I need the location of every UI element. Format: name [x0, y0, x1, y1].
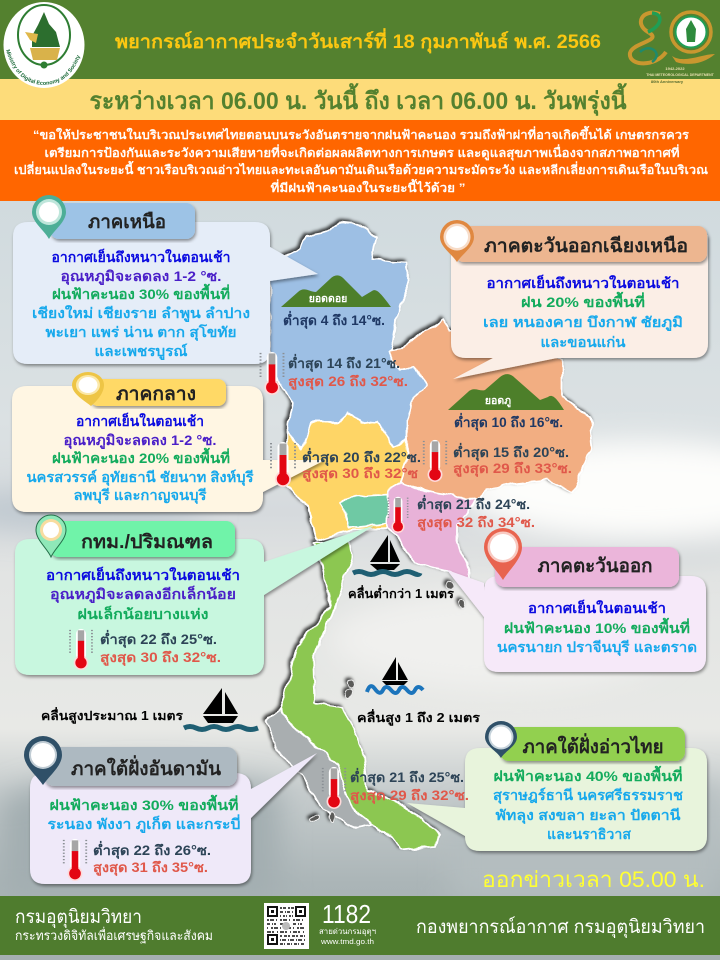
text: north forecast — [32, 248, 250, 360]
mountain: northeast peak — [448, 374, 564, 410]
temperature: north: ต่ำสุด 14 ถึง 21°ซ. — [288, 353, 400, 372]
islands — [311, 582, 466, 822]
QR code — [264, 903, 309, 949]
logo: ministry emblem — [4, 2, 84, 88]
label: waves Andaman: คลื่นสูงประมาณ 1 เมตร — [41, 707, 183, 724]
icon: thermometer northeast — [424, 440, 446, 482]
map of Thailand — [267, 223, 593, 850]
text: north forecast: เชียงใหม่ เชียงราย ลำพูน ลำปาง — [32, 304, 250, 322]
temperature: south — [350, 767, 469, 804]
text: central forecast: อุณหภูมิจะลดลง 1-2 °ซ. — [64, 432, 216, 449]
region: Bangkok — [340, 493, 388, 527]
temperature: north: สูงสุด 26 ถึง 32°ซ. — [288, 374, 408, 390]
header band — [0, 0, 720, 79]
heading bar: Bangkok — [50, 521, 235, 557]
text: central forecast: ฝนฟ้าคะนอง 20% ของพื้นที่ — [52, 447, 230, 466]
temperature: northeast peak: ต่ำสุด 10 ถึง 16°ซ. — [454, 412, 563, 431]
text: central forecast: นครสวรรค์ อุทัยธานี ชัยนาท สิงห์บุรี — [26, 469, 254, 486]
heading bar: central — [90, 379, 226, 406]
temperature: Andaman: ต่ำสุด 22 ถึง 26°ซ. — [93, 840, 211, 859]
temperature: Bangkok: ต่ำสุด 22 ถึง 25°ซ. — [100, 629, 217, 648]
text: east forecast: ฝนฟ้าคะนอง 10% ของพื้นที่ — [504, 617, 690, 636]
text: east forecast: อากาศเย็นในตอนเช้า — [528, 599, 666, 616]
mountain: north peak: ยอดดอย — [309, 293, 347, 305]
warning text: ที่มีฝนฟ้าคะนองในระยะนี้ไว้ด้วย ” — [270, 178, 466, 195]
temperature: east: สูงสุด 32 ถึง 34°ซ. — [417, 515, 535, 531]
text: east forecast — [497, 599, 697, 656]
icon: boat lower gulf — [367, 657, 423, 693]
temperature: south: ต่ำสุด 21 ถึง 25°ซ. — [350, 767, 464, 786]
heading: central: ภาคกลาง — [116, 384, 196, 405]
text: south gulf forecast: และนราธิวาส — [547, 826, 631, 842]
warning band — [0, 120, 720, 201]
panel: south Andaman — [24, 736, 317, 884]
panel: Bangkok and vicinity — [15, 515, 375, 675]
heading bar: east — [495, 547, 679, 587]
temperature: north — [288, 353, 408, 390]
heading: Andaman: ภาคใต้ฝั่งอันดามัน — [71, 755, 221, 780]
subtitle band — [0, 79, 720, 120]
pin: east — [484, 528, 522, 580]
hotline: 1182 — [322, 899, 371, 929]
footer: department name — [15, 907, 213, 944]
footer: forecast bureau: กองพยากรณ์อากาศ กรมอุตุนิยมวิทยา — [416, 916, 705, 939]
text: Bangkok forecast: อุณหภูมิจะลดลงอีกเล็กน้อย — [50, 585, 236, 603]
icon: boat Andaman — [184, 688, 258, 730]
heading: northeast: ภาคตะวันออกเฉียงเหนือ — [484, 235, 688, 257]
panel: south gulf — [407, 721, 707, 851]
text: Andaman forecast: ระนอง พังงา ภูเก็ต และกระบี่ — [48, 814, 241, 833]
text: Bangkok forecast: อากาศเย็นถึงหนาวในตอนเช้า — [46, 566, 240, 583]
temperature: east — [417, 494, 535, 531]
temperature: east: ต่ำสุด 21 ถึง 24°ซ. — [417, 494, 530, 513]
text: northeast forecast: และขอนแก่น — [540, 334, 626, 350]
heading bar: north — [50, 203, 195, 239]
icon: thermometer Bangkok — [70, 629, 92, 670]
footer band — [0, 896, 720, 955]
temperature: northeast — [453, 442, 572, 477]
region: south — [280, 540, 440, 850]
text: south gulf forecast — [493, 765, 684, 842]
text: central forecast: อากาศเย็นในตอนเช้า — [76, 412, 204, 429]
panel: central — [12, 372, 325, 512]
region: east — [388, 482, 477, 583]
temperature: Bangkok — [100, 629, 221, 666]
icon: thermometer east — [388, 497, 408, 533]
temperature: central — [302, 447, 421, 482]
pin: northeast — [440, 220, 474, 262]
icon: thermometer Andaman — [64, 839, 86, 881]
hotline — [319, 899, 376, 946]
temperature: northeast: ต่ำสุด 15 ถึง 20°ซ. — [453, 442, 569, 461]
temperature: northeast: สูงสุด 29 ถึง 33°ซ. — [453, 461, 572, 477]
heading bar: Andaman — [44, 747, 237, 786]
temperature: south: สูงสุด 29 ถึง 32°ซ. — [350, 788, 469, 804]
logo: 80th anniversary: 1942-2022 — [665, 66, 685, 71]
icon: thermometer south — [323, 767, 345, 809]
footer: department name: กรมอุตุนิยมวิทยา — [15, 907, 142, 929]
text: northeast forecast: อากาศเย็นถึงหนาวในตอนเช้า — [486, 274, 680, 291]
region: central — [287, 413, 408, 540]
icon: thermometer central — [271, 442, 295, 487]
heading: east: ภาคตะวันออก — [538, 556, 652, 577]
pin: north — [32, 195, 66, 239]
text: south gulf forecast: สุราษฎร์ธานี นครศรีธรรมราช — [493, 787, 684, 804]
label: waves lower gulf: คลื่นสูง 1 ถึง 2 เมตร — [357, 709, 480, 726]
issue time: ออกข่าวเวลา 05.00 น. — [482, 867, 705, 892]
panel: north — [13, 195, 318, 364]
icon: thermometer north — [261, 352, 283, 395]
text: northeast forecast: ฝน 20% ของพื้นที่ — [521, 291, 645, 310]
text: Andaman forecast: ฝนฟ้าคะนอง 30% ของพื้นที่ — [50, 794, 238, 813]
text: northeast forecast — [483, 274, 683, 350]
title: พยากรณ์อากาศประจำวันเสาร์ที่ 18 กุมภาพันธ์ พ.ศ. 2566 — [115, 28, 601, 54]
temperature: north peak: ต่ำสุด 4 ถึง 14°ซ. — [283, 310, 385, 329]
logo: 80th anniversary: THAI METEOROLOGICAL DEPARTMENT — [646, 73, 715, 77]
subtitle: ระหว่างเวลา 06.00 น. วันนี้ ถึง เวลา 06.00 น. วันพรุ่งนี้ — [90, 82, 628, 117]
logo: ministry emblem: Ministry of Digital Economy and Society — [6, 49, 80, 85]
temperature: Bangkok: สูงสุด 30 ถึง 32°ซ. — [100, 650, 221, 666]
text: Bangkok forecast: ฝนเล็กน้อยบางแห่ง — [78, 605, 209, 622]
text: Andaman forecast — [48, 794, 241, 833]
logo: 80th anniversary: 80th Anniversary — [651, 79, 684, 84]
text: east forecast: นครนายก ปราจีนบุรี และตราด — [497, 639, 697, 656]
text: Bangkok forecast — [46, 566, 240, 622]
text: north forecast: และเพชรบูรณ์ — [94, 343, 188, 360]
warning text — [14, 125, 708, 195]
footer: department name: กระทรวงดิจิทัลเพื่อเศรษฐกิจและสังคม — [15, 927, 213, 944]
text: south gulf forecast: พัทลุง สงขลา ยะลา ปัตตานี — [496, 807, 681, 824]
mountain: north peak — [281, 275, 391, 307]
text: central forecast: ลพบุรี และกาญจนบุรี — [74, 487, 207, 504]
temperature: Andaman — [93, 840, 211, 876]
text: south gulf forecast: ฝนฟ้าคะนอง 40% ของพื้นที่ — [494, 765, 682, 784]
heading: south gulf: ภาคใต้ฝั่งอ่าวไทย — [522, 733, 664, 758]
mountain: northeast peak: ยอดภู — [485, 395, 511, 408]
hotline: สายด่วนกรมอุตุฯ — [319, 927, 376, 936]
heading: north: ภาคเหนือ — [88, 211, 166, 233]
text: north forecast: อากาศเย็นถึงหนาวในตอนเช้า — [52, 248, 230, 265]
text: north forecast: ฝนฟ้าคะนอง 30% ของพื้นที่ — [52, 283, 230, 302]
region: northeast — [388, 320, 593, 500]
text: northeast forecast: เลย หนองคาย บึงกาฬ ชัยภูมิ — [483, 314, 683, 331]
temperature: central: สูงสุด 30 ถึง 32°ซ — [302, 466, 418, 482]
pin: south gulf — [485, 721, 517, 758]
region: north — [270, 223, 427, 450]
heading bar: northeast — [455, 226, 707, 262]
warning text: “ขอให้ประชาชนในบริเวณประเทศไทยตอนบนระวังอันตรายจากฝนฟ้าคะนอง รวมถึงฟ้าผ่าที่อาจเกิดขึ้นได้ เกษตรกรควร — [33, 125, 690, 142]
heading bar: south gulf — [500, 727, 685, 761]
warning text: เตรียมการป้องกันและระวังความเสียหายที่จะเกิดต่อผลผลิตทางการเกษตร และดูแลสุขภาพเนื่องจากสภาพอากาศที่ — [44, 144, 680, 161]
temperature: central: ต่ำสุด 20 ถึง 22°ซ. — [302, 447, 421, 466]
text: central forecast — [26, 412, 254, 504]
temperature: Andaman: สูงสุด 31 ถึง 35°ซ. — [93, 860, 208, 876]
hotline: www.tmd.go.th — [320, 937, 374, 946]
warning text: เปลี่ยนแปลงในระยะนี้ ชาวเรือบริเวณอ่าวไทยและทะเลอันดามันเดินเรือด้วยความระมัดระวัง และหลีกเลี่ยงการเดินเรือในบริเวณ — [14, 160, 708, 177]
pin: Bangkok — [36, 515, 66, 557]
logo: 80th anniversary — [630, 12, 715, 84]
region: Andaman coast — [267, 710, 372, 828]
text: north forecast: พะเยา แพร่ น่าน ตาก สุโขทัย — [46, 323, 236, 341]
pin: Andaman — [24, 736, 62, 785]
icon: boat upper gulf — [353, 535, 420, 574]
panel: east — [447, 528, 706, 672]
heading: Bangkok: กทม./ปริมณฑล — [81, 532, 213, 553]
text: north forecast: อุณหภูมิจะลดลง 1-2 °ซ. — [60, 268, 222, 285]
label: waves upper gulf: คลื่นต่ำกว่า 1 เมตร — [348, 585, 454, 601]
panel: northeast — [440, 220, 708, 379]
pin: central — [72, 372, 104, 406]
